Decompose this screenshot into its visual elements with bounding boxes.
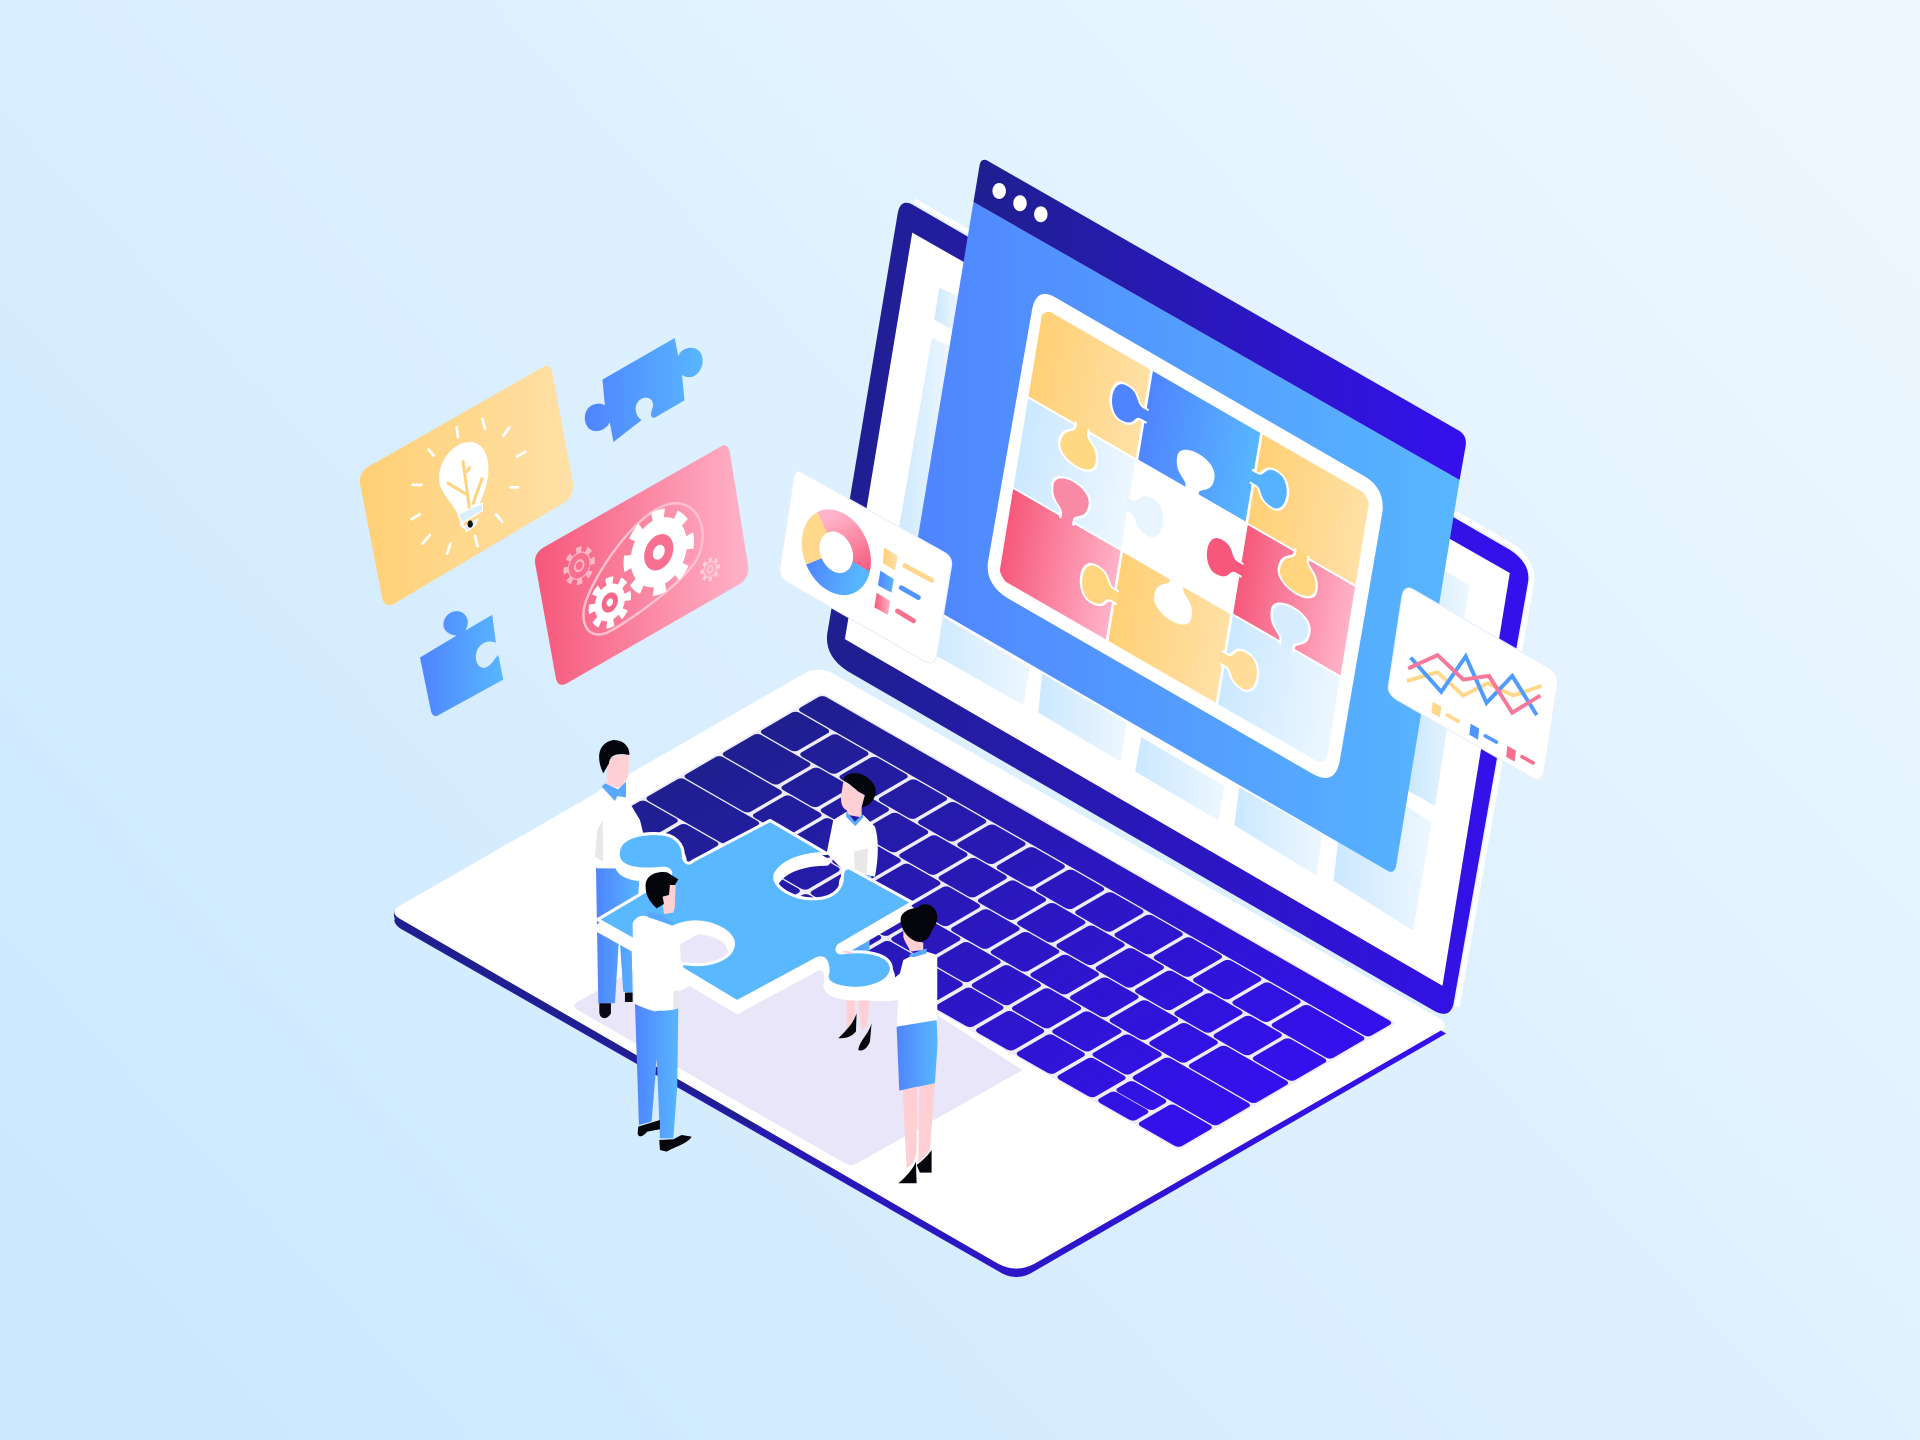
trousers <box>635 1003 678 1138</box>
bulb rays <box>411 419 525 553</box>
outline gear right <box>700 556 720 583</box>
window dots <box>992 183 1048 222</box>
lid highlight <box>915 201 1532 1007</box>
hair <box>599 740 629 773</box>
light bulb <box>439 442 489 531</box>
card panel <box>780 471 952 663</box>
person: woman back right <box>827 773 878 1051</box>
card panel <box>535 445 748 685</box>
puzzle board <box>997 306 1371 768</box>
touchpad <box>574 900 1022 1165</box>
legs <box>847 998 870 1030</box>
neck and face <box>607 755 629 788</box>
collar <box>908 948 927 957</box>
laptop <box>394 201 1532 1277</box>
laptop deck <box>394 670 1445 1269</box>
face <box>903 930 923 952</box>
window body <box>909 202 1460 872</box>
chart legend <box>1431 702 1533 763</box>
donut chart <box>796 495 876 609</box>
face <box>662 885 676 914</box>
donut chart card <box>780 471 952 663</box>
shoes <box>838 1013 872 1051</box>
shoes <box>898 1150 932 1183</box>
puzzle cells <box>997 306 1371 768</box>
base edge thick section <box>394 911 756 1129</box>
laptop lid frame <box>827 203 1528 1014</box>
card panel <box>1388 588 1558 780</box>
skirt <box>897 1019 938 1091</box>
floating puzzle piece bottom <box>420 611 503 716</box>
line chart card <box>1388 588 1558 780</box>
person: woman front <box>827 904 938 1183</box>
hair <box>646 872 678 908</box>
gears card <box>535 445 748 685</box>
floating puzzle piece top <box>585 338 703 442</box>
collar <box>647 912 673 925</box>
face <box>841 782 865 817</box>
shoes <box>599 993 633 1018</box>
small gear <box>589 573 631 632</box>
puzzle knobs <box>1038 354 1331 720</box>
large gear <box>624 503 694 601</box>
person: man front <box>633 872 732 1152</box>
window title bar <box>973 160 1466 480</box>
keyboard <box>604 693 1397 1150</box>
skirt <box>843 870 872 952</box>
card panel <box>360 366 573 605</box>
puzzle frame <box>988 294 1383 778</box>
outline gear left <box>564 544 595 588</box>
central puzzle piece <box>598 820 912 1010</box>
hair <box>901 904 937 942</box>
torso fold <box>854 848 868 874</box>
hand <box>843 951 853 954</box>
piece top <box>598 820 912 1002</box>
hair <box>843 773 876 807</box>
laptop screen <box>845 233 1510 986</box>
torso <box>827 812 878 877</box>
legend <box>874 547 932 621</box>
browser window <box>909 160 1466 872</box>
torso and arm <box>633 916 732 1011</box>
torso fold <box>595 820 603 862</box>
collar <box>846 812 863 826</box>
person: man back left <box>593 740 643 1018</box>
legs <box>903 1083 935 1168</box>
chart lines <box>1407 655 1542 715</box>
laptop base edge <box>394 676 1446 1277</box>
collar <box>602 782 626 801</box>
screen tiles <box>894 288 1469 931</box>
torso and arm <box>827 952 937 1027</box>
torso <box>593 787 643 868</box>
piece thickness <box>598 829 912 1010</box>
torso fold <box>673 990 678 1009</box>
idea card <box>360 366 573 605</box>
belt <box>583 503 703 635</box>
shoes <box>638 1120 692 1152</box>
trousers <box>596 867 640 1003</box>
